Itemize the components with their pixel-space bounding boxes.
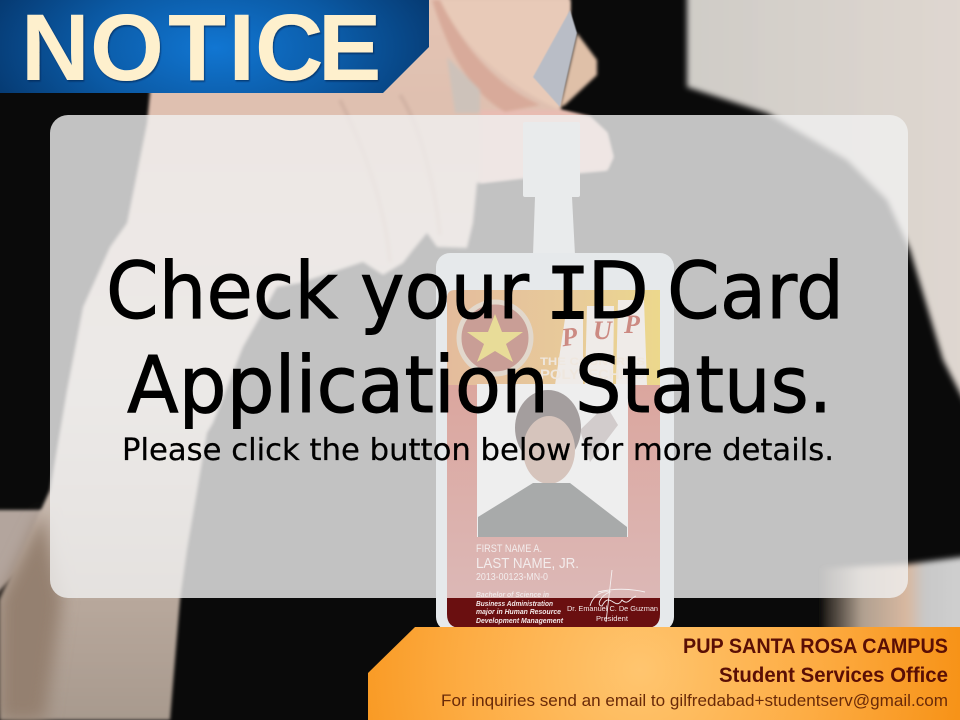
ID programme text: Development Management (476, 616, 563, 625)
ID dark footer (447, 598, 660, 628)
wall behind the person (687, 0, 960, 410)
pinching fingers (340, 0, 613, 262)
translucent content panel (50, 115, 908, 598)
ID card (436, 253, 674, 631)
notice banner (0, 0, 429, 101)
red card body (447, 385, 660, 598)
lower left wall (0, 510, 45, 600)
university name: POLYTECHNIC (540, 366, 645, 382)
ID programme text: Business Administration (476, 599, 553, 608)
PUP letters panel (555, 300, 647, 385)
lower right wall (822, 556, 960, 640)
headline: I (546, 254, 590, 342)
ID holder name text: LAST NAME, JR. (476, 555, 579, 572)
ID holder name text: FIRST NAME A. (476, 543, 542, 555)
PUP letters panel: P (623, 310, 641, 339)
headline: Card (667, 247, 844, 337)
campus name: PUP SANTA ROSA CAMPUS (683, 635, 948, 658)
PUP letters panel: P (559, 321, 580, 352)
university name: THE COUNTRY'S (540, 356, 645, 368)
header band (447, 290, 660, 385)
headline: D (587, 247, 649, 337)
card holder (436, 253, 674, 631)
lanyard strap (533, 10, 577, 107)
office name: Student Services Office (719, 664, 948, 687)
headline: Check (106, 247, 338, 337)
lanyard clip (523, 122, 580, 277)
hand and forearm (0, 0, 613, 720)
ID programme text: major in Human Resource (476, 607, 561, 616)
ID holder name text (476, 543, 579, 583)
PUP letters panel: U (593, 316, 613, 345)
headline: Status. (575, 341, 832, 431)
ID photo (477, 384, 628, 537)
headline (106, 247, 844, 431)
president signature and name: Dr. Emanuel C. De Guzman (567, 604, 658, 613)
ID programme text (476, 590, 563, 625)
ID programme text: Bachelor of Science in (476, 590, 549, 599)
headline: Application (127, 341, 549, 431)
headline: your (360, 247, 530, 337)
ID holder name text: 2013-00123-MN-0 (476, 572, 548, 583)
inquiries line: For inquiries send an email to gilfredabad+studentserv@gmail.com (441, 691, 948, 710)
PUP seal (459, 302, 531, 374)
subheading: Please click the button below for more details. (122, 433, 834, 468)
president signature and name: President (596, 614, 629, 623)
footer contact banner (368, 627, 960, 720)
forearm shadow (0, 512, 62, 720)
president signature and name (567, 570, 658, 623)
university name (540, 356, 645, 382)
neck (560, 33, 597, 107)
